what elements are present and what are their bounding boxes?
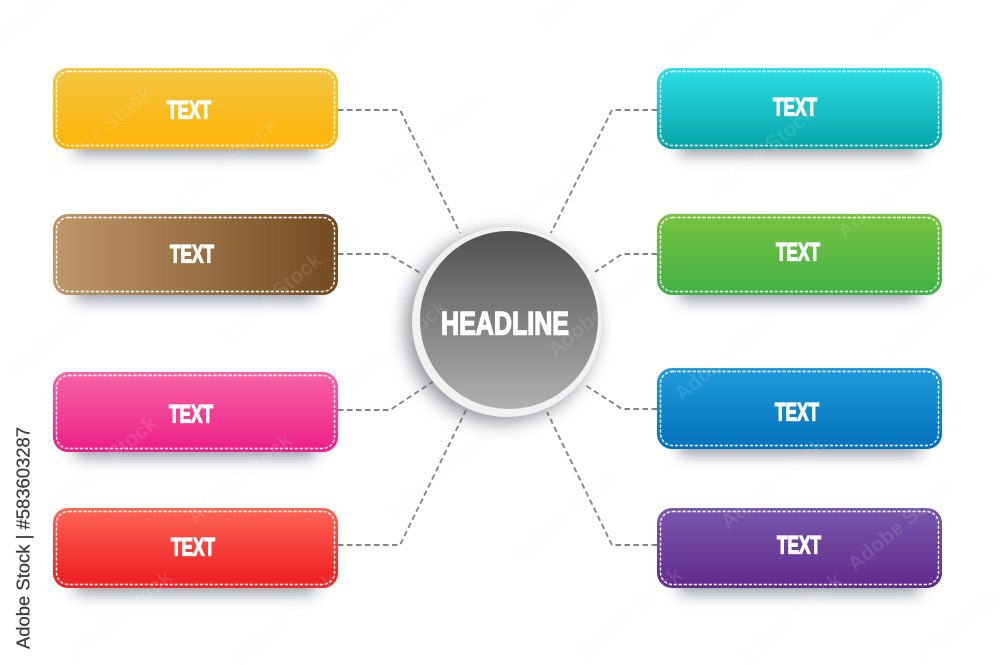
panel: pink text box: TEXT <box>169 400 213 428</box>
connector lines <box>338 110 657 545</box>
watermark pattern: Adobe Stock <box>833 144 947 244</box>
panel: cyan text box <box>657 68 942 154</box>
panel: green text box: TEXT <box>776 238 820 266</box>
central headline circle: HEADLINE <box>441 306 569 342</box>
panel: blue text box: TEXT <box>775 398 819 426</box>
panel: red text box: TEXT <box>171 534 215 562</box>
watermark pattern: Adobe Stock <box>168 114 282 214</box>
panel: blue text box <box>657 368 942 454</box>
panel: brown text box <box>53 214 338 300</box>
panel: cyan text box: TEXT <box>773 94 817 122</box>
watermark pattern: Adobe Stock <box>670 306 784 406</box>
watermark pattern: Adobe Stock <box>373 89 487 189</box>
stock id caption: Adobe Stock | #583603287 <box>14 427 34 649</box>
watermark pattern: Adobe Stock <box>48 412 162 512</box>
panel: yellow text box: TEXT <box>167 96 211 124</box>
watermark pattern: Adobe Stock <box>63 566 177 665</box>
panel: purple text box: TEXT <box>777 532 821 560</box>
watermark pattern: Adobe Stock <box>716 434 830 534</box>
watermark pattern: Adobe Stock <box>508 466 622 566</box>
watermark pattern: Adobe Stock <box>503 132 617 232</box>
watermark pattern: Adobe Stock <box>843 476 957 576</box>
watermark pattern: Adobe Stock <box>383 424 497 524</box>
central headline circle <box>406 227 602 422</box>
panel: yellow text box <box>53 68 338 154</box>
watermark pattern: Adobe Stock <box>543 262 657 362</box>
panel: red text box <box>53 508 338 593</box>
panel: green text box <box>657 214 942 300</box>
watermark pattern: Adobe Stock <box>3 284 117 384</box>
watermark pattern: Adobe Stock <box>573 564 687 664</box>
watermark pattern: Adobe Stock <box>706 102 820 202</box>
panel: brown text box: TEXT <box>170 240 214 268</box>
watermark pattern: Adobe Stock <box>338 296 452 396</box>
panel: purple text box <box>657 508 942 593</box>
watermark pattern: Adobe Stock <box>878 264 992 364</box>
watermark pattern: Adobe Stock <box>213 249 327 349</box>
watermark pattern: Adobe Stock <box>43 82 157 182</box>
panel: pink text box <box>53 372 338 457</box>
watermark pattern: Adobe Stock <box>183 429 297 529</box>
